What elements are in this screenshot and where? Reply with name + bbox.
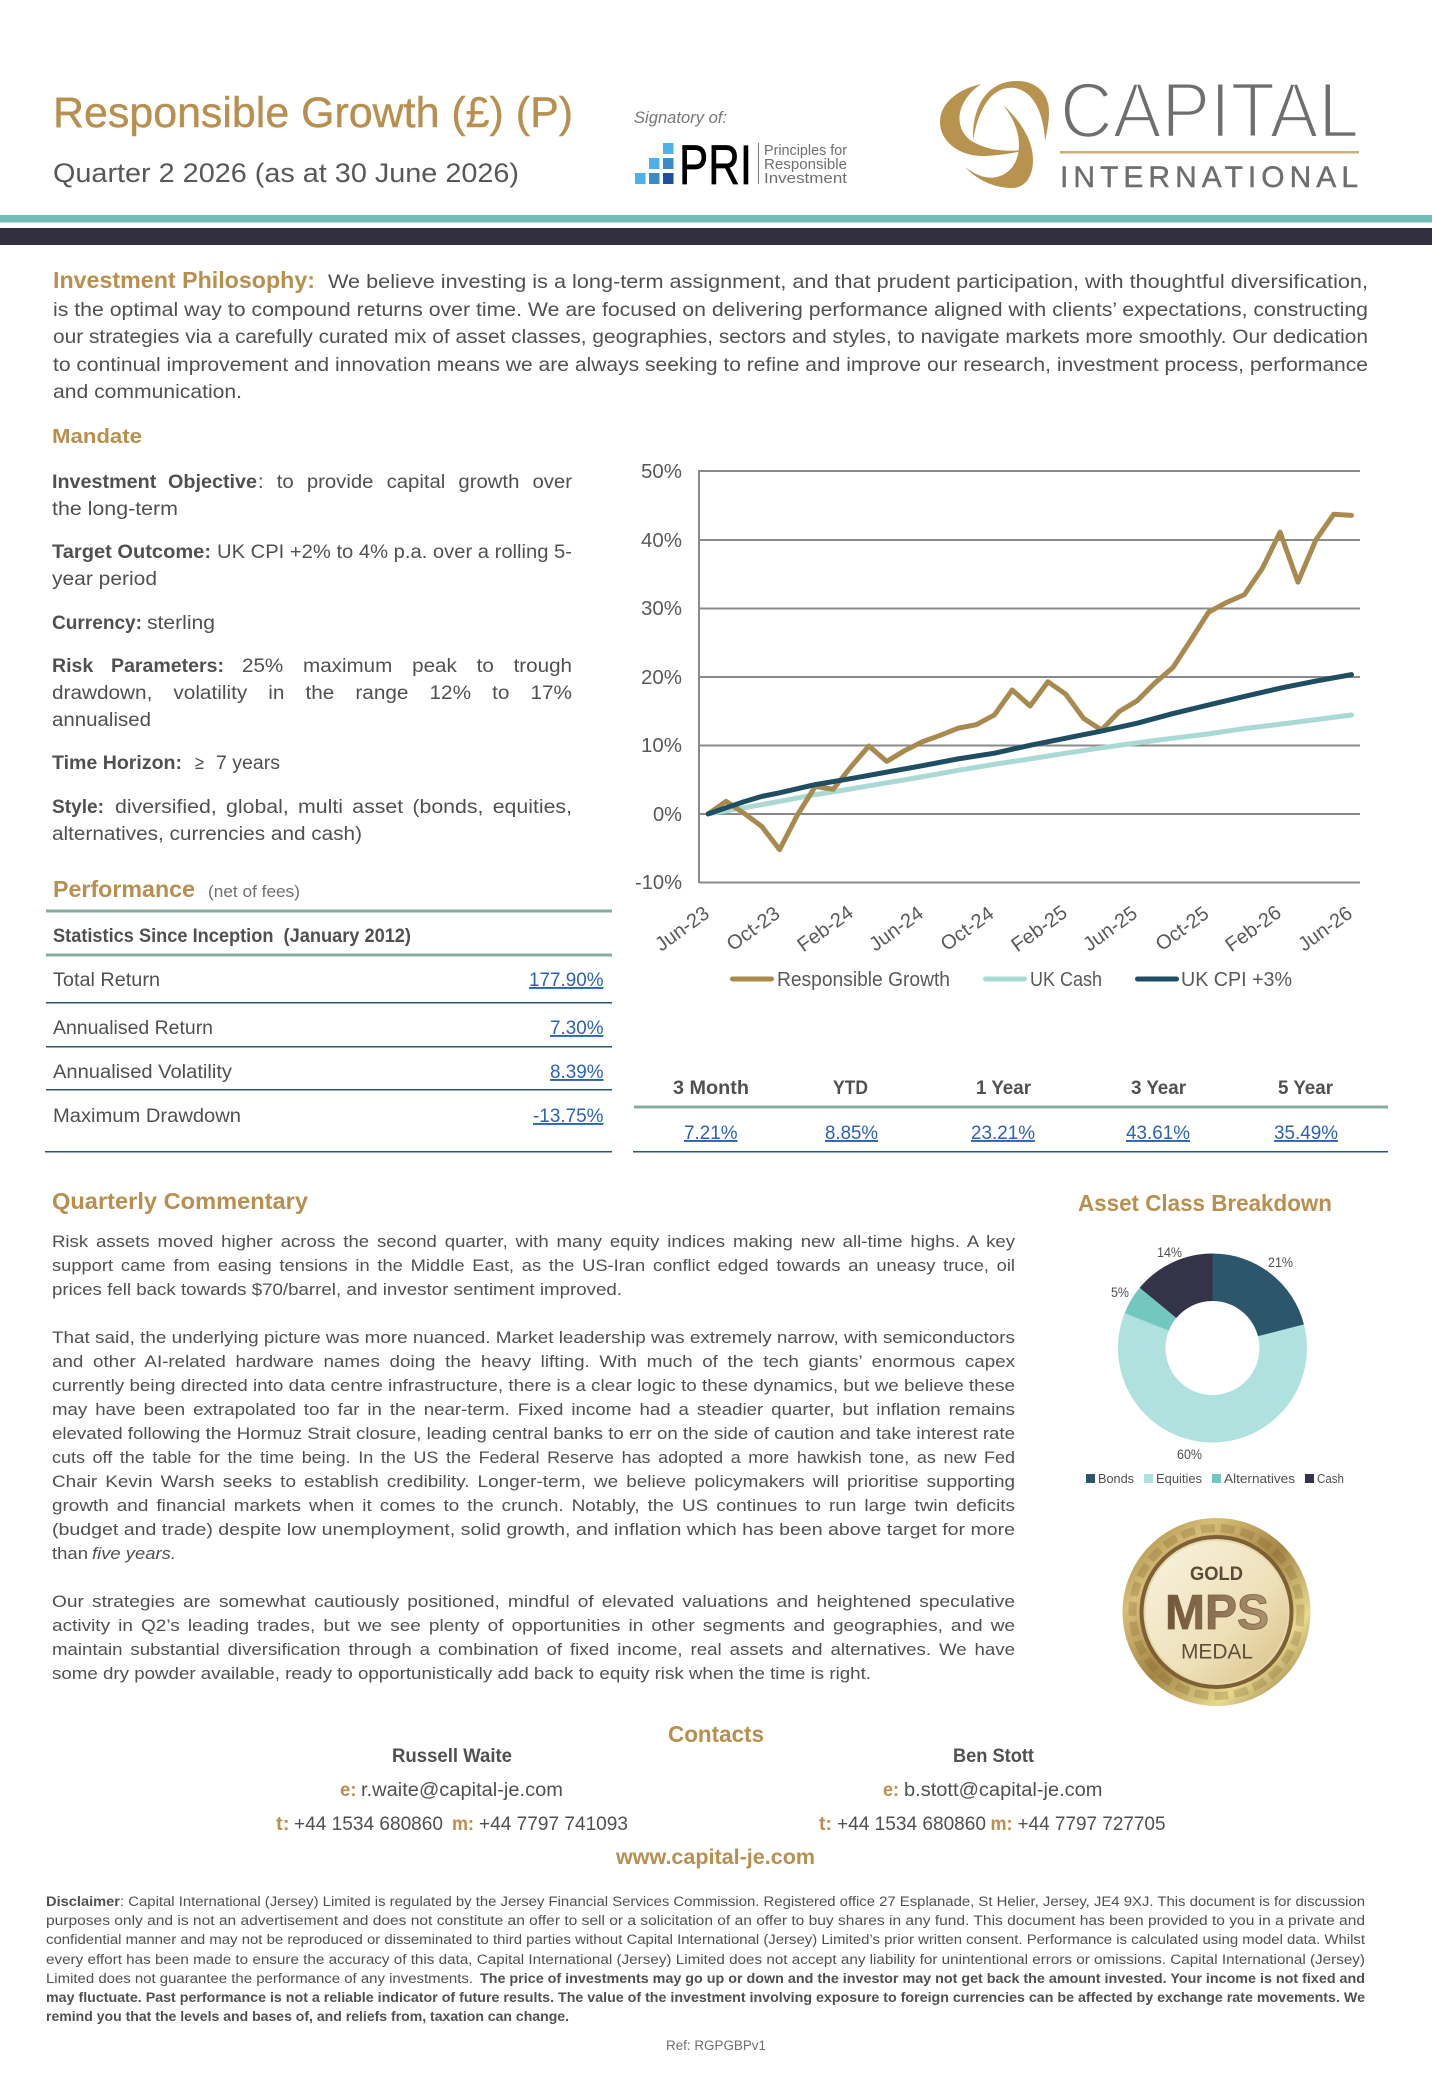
row: annualised return: Annualised Return — [53, 1018, 213, 1039]
x axis labels: Feb-26 — [1221, 902, 1286, 957]
disclaimer: may fluctuate. Past performance is not a reliable indicator of future results. The value of the investment involving exposure to foreign currencies can be affected by exchange rate movements. We — [46, 1990, 1366, 2005]
table: period returns — [633, 1078, 1388, 1152]
table: period returns: 7.21% — [684, 1123, 738, 1144]
heading: contacts: Contacts — [668, 1721, 764, 1747]
commentary paragraph 2: than — [52, 1544, 88, 1563]
row: annualised return — [53, 1018, 604, 1039]
x axis labels: Jun-24 — [865, 902, 928, 956]
investment objective: : to provide capital growth over — [258, 472, 573, 493]
time horizon: 7 years — [216, 753, 280, 774]
series: UK CPI +3% — [708, 675, 1352, 814]
contact: Russell Waite — [276, 1746, 628, 1835]
donut chart: 21% — [1268, 1254, 1293, 1270]
disclaimer: Limited does not guarantee the performance of any investments. — [46, 1971, 473, 1986]
commentary paragraph 3 — [52, 1592, 1015, 1683]
style — [52, 797, 572, 845]
contact: Ben Stott: Ben Stott — [953, 1746, 1035, 1767]
icon: Capital International logo: INTERNATIONAL — [1060, 161, 1358, 194]
heading: quarterly commentary: Quarterly Commentary — [52, 1188, 308, 1214]
heading: performance: Performance — [53, 876, 195, 902]
contact: Ben Stott: t: — [819, 1814, 832, 1835]
series: UK Cash — [708, 715, 1352, 814]
contact: Russell Waite: t: — [276, 1814, 290, 1835]
icon: PRI logo: Responsible — [764, 157, 847, 173]
commentary paragraph 2: That said, the underlying picture was more nuanced. Market leadership was extremely narrow, with semiconductors — [52, 1328, 1015, 1347]
commentary paragraph 3: Our strategies are somewhat cautiously positioned, mindful of elevated valuations and heightened speculative — [52, 1592, 1015, 1611]
y axis labels: 50% — [641, 461, 682, 483]
commentary paragraph 3: some dry powder available, ready to opportunistically add back to equity risk when the time is right. — [52, 1664, 871, 1683]
style: alternatives, currencies and cash) — [52, 824, 362, 845]
table: period returns: 35.49% — [1274, 1123, 1338, 1144]
investment objective: the long-term — [52, 499, 178, 520]
disclaimer — [46, 1894, 1366, 2024]
donut chart: 60% — [1177, 1446, 1202, 1462]
donut chart — [1111, 1244, 1307, 1462]
panel: mandate — [52, 425, 573, 845]
panel: quarterly commentary — [52, 1188, 1016, 1683]
icon: PRI logo: PRI — [679, 133, 752, 196]
investment philosophy text — [53, 267, 1368, 403]
contact: Ben Stott: +44 7797 727705 — [1018, 1814, 1166, 1835]
panel: asset class breakdown — [1078, 1190, 1344, 1706]
panel: performance statistics — [45, 876, 612, 1152]
y axis labels: -10% — [635, 872, 682, 894]
risk parameters — [52, 656, 572, 731]
x axis labels: Feb-25 — [1007, 902, 1072, 957]
y axis labels: 10% — [641, 735, 682, 757]
time horizon: Time Horizon: — [52, 753, 182, 774]
disclaimer: every effort has been made to ensure the accuracy of this data, Capital International (Jersey) Limited does not accept any liability for unintentional errors or omissions. Capital International (Jersey) — [46, 1952, 1365, 1967]
reference code: Ref: RGPGBPv1 — [666, 2038, 766, 2053]
contact: Russell Waite: m: — [452, 1814, 474, 1835]
x axis labels: Oct-24 — [937, 903, 998, 956]
table: period returns: 23.21% — [971, 1123, 1035, 1144]
website: www.capital-je.com — [615, 1846, 815, 1869]
contact: Ben Stott: +44 1534 680860 — [837, 1814, 986, 1835]
table: period returns: YTD — [833, 1078, 868, 1099]
chart legend — [730, 969, 1292, 991]
target outcome — [52, 542, 572, 590]
icon: gold MPS medal — [1122, 1518, 1310, 1706]
disclaimer: remind you that the levels and bases of, and reliefs from, taxation can change. — [46, 2009, 569, 2024]
x axis labels: Jun-26 — [1294, 902, 1357, 956]
time horizon — [52, 753, 280, 774]
commentary paragraph 3: maintain substantial diversification through a combination of fixed income, real assets and alternatives. We have — [52, 1640, 1015, 1659]
y axis labels: 20% — [641, 667, 682, 689]
data series — [708, 514, 1352, 850]
currency: sterling — [147, 613, 215, 634]
donut legend — [1086, 1471, 1344, 1486]
investment philosophy text: and communication. — [53, 381, 242, 403]
icon: Capital International logo: CAPITAL — [1060, 66, 1359, 154]
heading: mandate: Mandate — [52, 425, 142, 448]
line chart: cumulative performance — [635, 461, 1360, 991]
commentary paragraph 2: currently being directed into data centre infrastructure, there is a clear logic to these dynamics, but we believe these — [52, 1376, 1015, 1395]
risk parameters: annualised — [52, 710, 151, 731]
panel: contacts — [276, 1721, 1166, 1869]
risk parameters: 25% maximum peak to trough — [242, 656, 572, 677]
x axis labels: Oct-23 — [723, 903, 784, 956]
series: Responsible Growth — [708, 514, 1352, 850]
investment philosophy text: our strategies via a carefully curated mix of asset classes, geographies, sectors and styles, to navigate markets more smoothly. Our dedication — [53, 326, 1368, 348]
header — [53, 66, 1359, 196]
icon: gold MPS medal: MEDAL — [1181, 1640, 1253, 1664]
disclaimer: The price of investments may go up or down and the investor may not get back the amount invested. Your income is not fixed and — [480, 1971, 1365, 1986]
commentary paragraph 2: and other AI-related hardware names doing the heavy lifting. With much of the tech giants’ enormous capex — [52, 1352, 1016, 1371]
commentary paragraph 2 — [52, 1328, 1016, 1563]
contact: Ben Stott: e: — [883, 1780, 899, 1801]
row: annualised return: 7.30% — [550, 1018, 604, 1039]
commentary paragraph 2: cuts off the table for the time being. In the US the Federal Reserve has adopted a more hawkish tone, as new Fed — [52, 1448, 1015, 1467]
target outcome: Target Outcome: — [52, 542, 211, 563]
table: period returns: 5 Year — [1278, 1078, 1334, 1099]
target outcome: year period — [52, 569, 157, 590]
x axis labels: Jun-25 — [1079, 902, 1142, 956]
contact: Russell Waite: Russell Waite — [392, 1746, 512, 1767]
commentary paragraph 2: (budget and trade) despite low unemployment, solid growth, and inflation which has been above target for more — [52, 1520, 1015, 1539]
commentary paragraph 1: Risk assets moved higher across the second quarter, with many equity indices making new all-time highs. A key — [52, 1232, 1016, 1251]
commentary paragraph 2: elevated following the Hormuz Strait closure, leading central banks to err on the side of caution and take interest rate — [52, 1424, 1015, 1443]
icon: PRI logo — [635, 133, 847, 196]
contact: Ben Stott: b.stott@capital-je.com — [904, 1780, 1102, 1801]
investment objective — [52, 472, 573, 520]
disclaimer: confidential manner and may not be reproduced or disseminated to third parties without Capital International (Jersey) Limited’s prior written consent. Performance is calculated using model data. Whilst — [46, 1932, 1365, 1947]
investment philosophy text: to continual improvement and innovation means we are always seeking to refine and improve our research, investment process, performance — [53, 354, 1368, 376]
icon: Capital International logo — [940, 66, 1359, 194]
target outcome: UK CPI +2% to 4% p.a. over a rolling 5- — [217, 542, 572, 563]
x axis labels: Oct-25 — [1152, 903, 1213, 956]
commentary paragraph 2: growth and financial markets when it comes to the crunch. Notably, the US continues to run large twin deficits — [52, 1496, 1015, 1515]
y axis labels: 0% — [653, 804, 682, 826]
currency — [52, 613, 215, 634]
disclaimer: Disclaimer — [46, 1894, 121, 1909]
y axis labels — [635, 461, 682, 894]
contact: Ben Stott: m: — [990, 1814, 1012, 1835]
currency: Currency: — [52, 613, 142, 634]
table: period returns: 8.85% — [825, 1123, 878, 1144]
style: diversified, global, multi asset (bonds, equities, — [115, 797, 572, 818]
x axis labels — [651, 902, 1357, 957]
icon: PRI logo: Investment — [764, 171, 847, 187]
commentary paragraph 2: may have been extrapolated too far in the near-term. Fixed income had a steadier quarter, but inflation remains — [52, 1400, 1015, 1419]
chart legend: UK Cash — [1030, 969, 1102, 991]
donut legend: Bonds — [1098, 1471, 1134, 1486]
icon: PRI logo: Principles for — [764, 143, 847, 159]
disclaimer: : Capital International (Jersey) Limited is regulated by the Jersey Financial Services Commission. Registered office 27 Esplanade, St Helier, Jersey, JE4 9XJ. This document is for discussion — [120, 1894, 1365, 1909]
disclaimer: purposes only and is not an advertisement and does not constitute an offer to sell or a solicitation of an offer to buy shares in any fund. This document has been provided to you in a private and — [46, 1913, 1365, 1928]
risk parameters: Risk Parameters: — [52, 656, 224, 677]
time horizon: ≥ — [195, 753, 204, 774]
heading: asset class breakdown: Asset Class Breakdown — [1078, 1190, 1332, 1216]
donut chart: 5% — [1111, 1284, 1129, 1300]
investment philosophy text: is the optimal way to compound returns over time. We are focused on delivering performance aligned with clients’ expectations, constructing — [53, 299, 1368, 321]
row: maximum drawdown: -13.75% — [533, 1106, 604, 1127]
row: total return: Total Return — [53, 970, 160, 991]
x axis labels: Feb-24 — [793, 902, 858, 957]
row: total return — [53, 970, 604, 991]
risk parameters: drawdown, volatility in the range 12% to 17% — [52, 683, 572, 704]
contact: Russell Waite: +44 7797 741093 — [479, 1814, 628, 1835]
signatory label: Signatory of: — [634, 108, 727, 127]
investment philosophy text: We believe investing is a long-term assignment, and that prudent participation, with thoughtful diversification, — [328, 271, 1368, 293]
row: annualised volatility: Annualised Volatility — [53, 1062, 233, 1083]
donut legend: Equities — [1156, 1471, 1202, 1486]
row: maximum drawdown: Maximum Drawdown — [53, 1106, 241, 1127]
commentary paragraph 1 — [52, 1232, 1016, 1299]
commentary paragraph 1: support came from easing tensions in the Middle East, as the US-Iran conflict edged towards an uneasy truce, oil — [52, 1256, 1015, 1275]
commentary paragraph 2: five years. — [92, 1544, 176, 1563]
contact: Ben Stott — [819, 1746, 1166, 1835]
investment philosophy text: Investment Philosophy: — [53, 267, 315, 293]
donut chart: 14% — [1157, 1244, 1182, 1260]
investment objective: Investment Objective — [52, 472, 257, 493]
table: period returns: 1 Year — [976, 1078, 1032, 1099]
row: maximum drawdown — [53, 1106, 604, 1127]
row: annualised volatility: 8.39% — [550, 1062, 604, 1083]
table: period returns: 3 Month — [673, 1078, 749, 1099]
y axis labels: 30% — [641, 598, 682, 620]
y axis labels: 40% — [641, 530, 682, 552]
contact: Russell Waite: r.waite@capital-je.com — [361, 1780, 563, 1801]
subtitle: Quarter 2 2026 (as at 30 June 2026) — [53, 158, 519, 188]
title: Responsible Growth (£) (P) — [53, 89, 573, 137]
icon: gold MPS medal: MPS — [1165, 1586, 1269, 1640]
x axis labels: Jun-23 — [651, 902, 714, 956]
style: Style: — [52, 797, 104, 818]
chart legend: Responsible Growth — [777, 969, 950, 991]
icon: gold MPS medal: GOLD — [1190, 1564, 1243, 1585]
table: period returns: 3 Year — [1131, 1078, 1187, 1099]
chart legend: UK CPI +3% — [1181, 969, 1292, 991]
row: annualised volatility — [53, 1062, 604, 1083]
commentary paragraph 3: activity in Q2’s leading trades, but we see plenty of opportunities in other segments and geographies, and we — [52, 1616, 1015, 1635]
table: period returns: 43.61% — [1126, 1123, 1190, 1144]
donut legend: Alternatives — [1224, 1471, 1296, 1486]
contact: Russell Waite: e: — [340, 1780, 356, 1801]
donut legend: Cash — [1317, 1471, 1344, 1486]
row: total return: 177.90% — [529, 970, 604, 991]
commentary paragraph 1: prices fell back towards $70/barrel, and investor sentiment improved. — [52, 1280, 622, 1299]
contact: Russell Waite: +44 1534 680860 — [294, 1814, 443, 1835]
net of fees note: (net of fees) — [208, 882, 300, 901]
commentary paragraph 2: Chair Kevin Warsh seeks to establish credibility. Longer-term, we believe policymakers will prioritise supporting — [52, 1472, 1015, 1491]
table heading: Statistics Since Inception (January 2012) — [53, 926, 411, 947]
